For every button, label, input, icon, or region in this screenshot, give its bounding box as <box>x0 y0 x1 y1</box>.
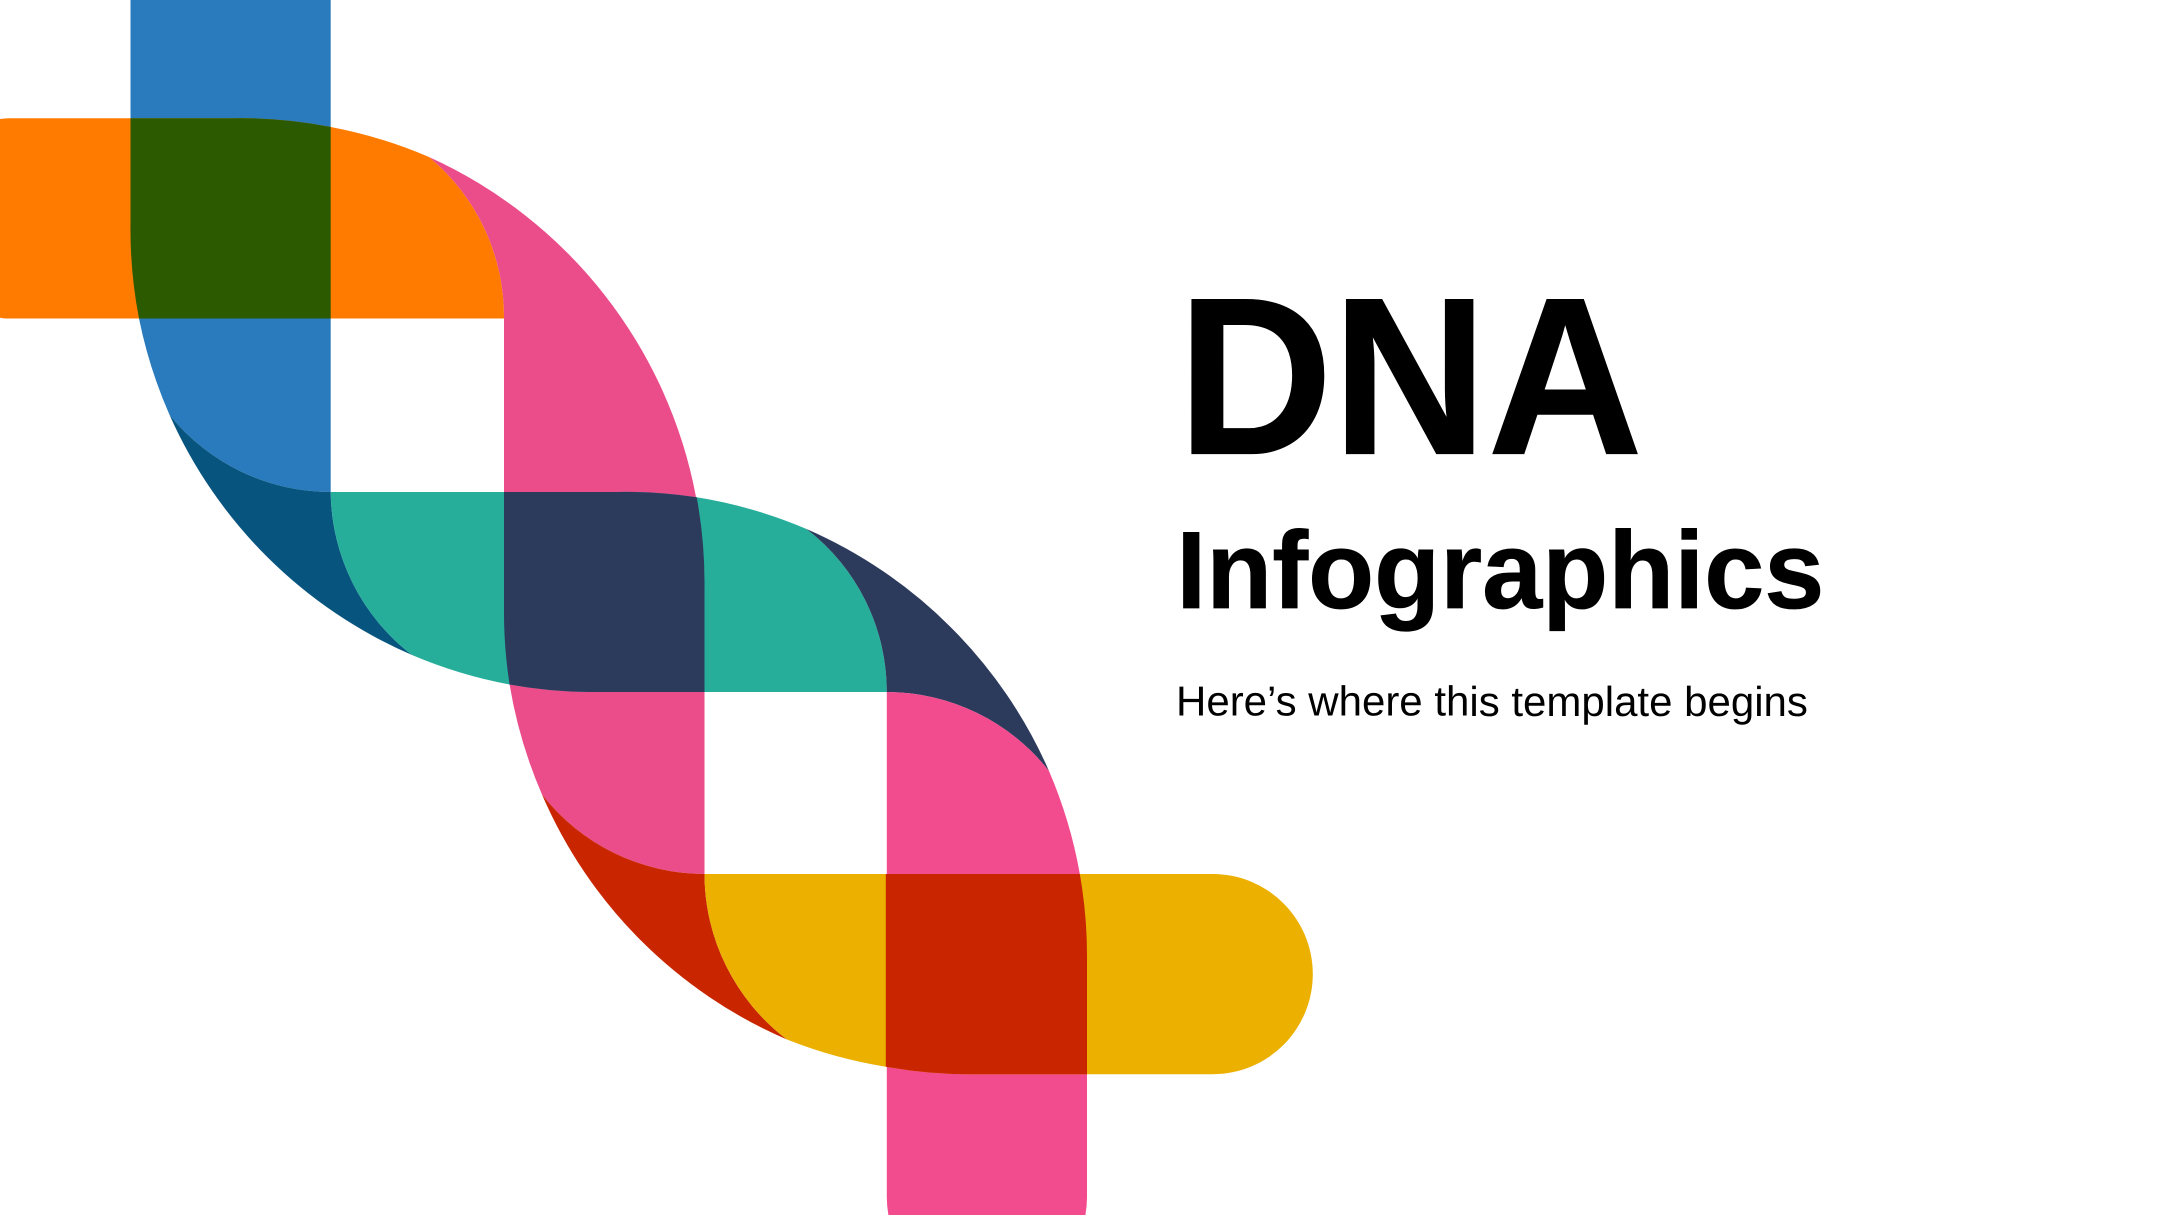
strand segment: bright pink vertical bar <box>887 692 1087 1215</box>
strand segment: pink diagonal band <box>429 157 705 874</box>
strand shadow: dark blue crescent <box>170 415 412 655</box>
heading: Infographics: Infographics <box>1176 509 1824 632</box>
DNA helix illustration <box>0 0 1313 1215</box>
strand shadow: red crescent <box>542 794 787 1040</box>
subtitle: Here’s where this template begins <box>1176 678 1808 725</box>
overlap: dark green <box>130 118 331 318</box>
title: DNA: DNA <box>1177 252 1643 502</box>
strand segment: blue vertical bar <box>130 0 331 492</box>
overlap: navy block <box>504 492 705 692</box>
strand segment: orange horizontal bar <box>0 118 504 318</box>
strand shadow: navy crescent <box>806 529 1049 771</box>
strand segment: teal horizontal bar <box>331 492 887 692</box>
strand segment: yellow pill bar <box>704 874 1313 1074</box>
overlap: red block <box>886 874 1087 1074</box>
